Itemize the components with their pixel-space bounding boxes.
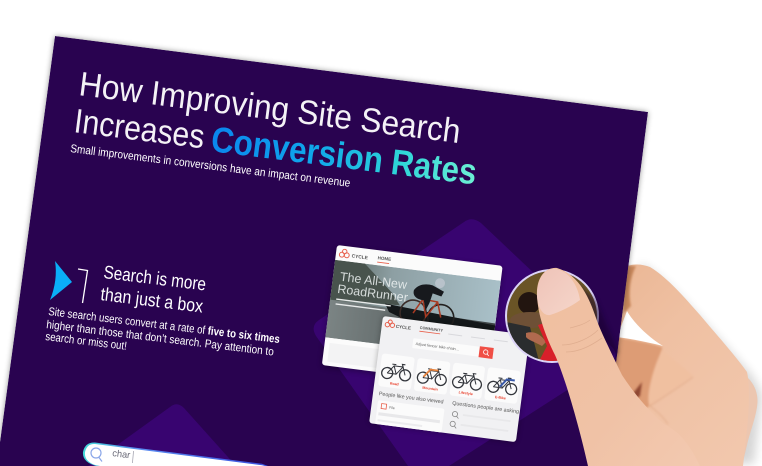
product tiles	[378, 353, 521, 404]
product tiles: Road	[390, 381, 399, 387]
title: How Improving Site Search	[77, 65, 463, 151]
hero headline: The All-New	[339, 270, 409, 292]
subtitle: Small improvements in conversions have an impact on revenue	[70, 143, 351, 190]
section body text: Site search users convert at a rate of five to six times	[48, 306, 280, 346]
logo	[385, 319, 395, 328]
section body text: search or miss out!	[45, 331, 127, 353]
product tiles: Mountain	[422, 386, 438, 392]
avatar circle with photo	[505, 269, 600, 365]
title: Increases	[72, 102, 207, 156]
section heading: than just a box	[100, 283, 205, 317]
browser card: search results	[369, 316, 530, 442]
background diamond: lower left	[88, 404, 236, 466]
browser card: search results: Adjust fencer bike chain...	[415, 342, 459, 352]
nav: COMMUNITY	[420, 326, 444, 333]
questions: Questions people are asking	[452, 401, 519, 415]
nav item: HOME	[377, 255, 391, 262]
crease dark spot	[630, 382, 642, 399]
product tiles: E-Bike	[495, 395, 506, 400]
cyclist	[399, 278, 454, 325]
browser card: homepage: CYCLE	[351, 253, 369, 262]
number 1	[78, 269, 88, 303]
hand shadow	[640, 263, 762, 464]
gap between finger and palm	[617, 311, 663, 346]
palm fold	[648, 350, 693, 406]
logo	[339, 249, 350, 258]
browser card: homepage	[322, 245, 503, 388]
product tiles: Lifestyle	[458, 390, 473, 396]
knuckle creases	[562, 320, 602, 352]
thumb holding the page	[537, 268, 700, 466]
search field	[412, 338, 481, 357]
icon: blue arrow	[50, 261, 72, 300]
crease line	[650, 377, 693, 424]
palm crease shading	[612, 336, 662, 408]
index finger shadow	[624, 266, 636, 313]
section body text: higher than those that don’t search. Pay attention to	[46, 319, 274, 358]
section heading: Search is more	[103, 261, 207, 295]
browser card: search results: CYCLE	[395, 324, 411, 331]
page: dark purple panel	[0, 36, 648, 466]
hero photo	[326, 260, 501, 344]
page shadow	[0, 36, 648, 464]
thumbnail	[537, 269, 580, 315]
hero photo: RoadRunner	[337, 282, 409, 305]
search box	[83, 442, 268, 466]
section heading	[101, 266, 206, 313]
search query: char	[112, 448, 131, 461]
background diamond: right	[314, 219, 616, 466]
little finger sliver	[735, 378, 758, 466]
title highlight: Conversion Rates	[209, 118, 479, 192]
browser card: search results: File	[389, 406, 395, 410]
hand: fingers and palm behind the page	[560, 264, 758, 466]
recommendations: People like you also viewed	[379, 391, 444, 405]
icon: magnifier	[91, 448, 102, 462]
